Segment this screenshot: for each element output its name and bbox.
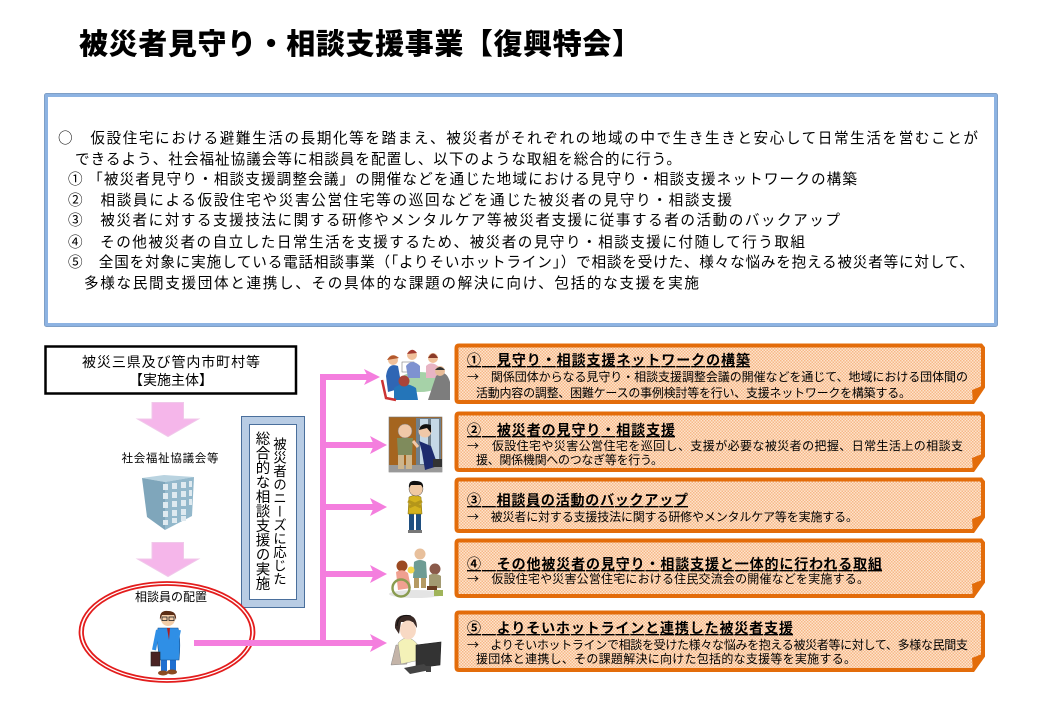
panel: overview (44, 94, 998, 326)
card 4: integrated efforts: ④ その他被災者の見守り・相談支援と一体的に行われる取組 (467, 554, 882, 574)
card 5: hotline (456, 612, 983, 671)
council label: 社会福祉協議会等 (122, 450, 218, 466)
overview text: ③ 被災者に対する支援技法に関する研修やメンタルケア等被災者支援に従事する者の活動のバックアップ (68, 209, 840, 230)
overview text: ④ その他被災者の自立した日常生活を支援するため、被災者の見守り・相談支援に付随して行う取組 (68, 231, 805, 252)
connector arrows (194, 369, 387, 652)
overview text: ○ 仮設住宅における避難生活の長期化等を踏まえ、被災者がそれぞれの地域の中で生き生きと安心して日常生活を営むことが (58, 127, 978, 148)
card 2: watching over: 援、関係機関へのつなぎ等を行う。 (476, 451, 663, 468)
card 5: hotline: ⑤ よりそいホットラインと連携した被災者支援 (467, 618, 793, 638)
implementing body box (46, 346, 296, 394)
implementing body box: 【実施主体】 (129, 370, 213, 390)
overview text: 多様な民間支援団体と連携し、その具体的な課題の解決に向け、包括的な支援を実施 (84, 272, 699, 293)
side box: comprehensive support (242, 416, 304, 608)
red double ellipse: counselor placement (80, 582, 254, 682)
side box: comprehensive support: 被災者のニーズに応じた (270, 437, 290, 586)
icon: hotline operator at computer (391, 615, 441, 674)
card 2: watching over: → 仮設住宅や災害公営住宅を巡回し、支援が必要な被災者の把握、日常生活上の相談支 (467, 437, 963, 454)
icon: building (142, 475, 194, 530)
icon: counselor with briefcase (151, 611, 180, 676)
card 5: hotline: → よりそいホットラインで相談を受けた様々な悩みを抱える被災者等に対して、多様な民間支 (467, 636, 968, 653)
card 2: watching over: ② 被災者の見守り・相談支援 (467, 420, 675, 440)
icon: residents exchange group (389, 548, 443, 598)
card 3: backup: ③ 相談員の活動のバックアップ (467, 490, 688, 510)
red double ellipse: counselor placement: 相談員の配置 (135, 588, 207, 605)
overview text (58, 127, 978, 293)
icon: home visit (389, 417, 442, 472)
overview text: ② 相談員による仮設住宅や災害公営住宅等の巡回などを通じた被災者の見守り・相談支援 (68, 189, 732, 210)
card 1: network: 活動内容の調整、困難ケースの事例検討等を行い、支援ネットワークを構築する。 (476, 384, 911, 401)
card 3: backup (456, 480, 983, 532)
overview text: できるよう、社会福祉協議会等に相談員を配置し、以下のような取組を総合的に行う。 (75, 148, 681, 169)
card 1: network: ① 見守り・相談支援ネットワークの構築 (467, 350, 750, 370)
icon: meeting group (382, 350, 450, 400)
overview text: ① 「被災者見守り・相談支援調整会議」の開催などを通じた地域における見守り・相談支援ネットワークの構築 (68, 168, 857, 189)
icon: thinking man (408, 481, 423, 533)
title: 被災者見守り・相談支援事業【復興特会】 (79, 21, 641, 63)
card 3: backup: → 被災者に対する支援技法に関する研修やメンタルケア等を実施する。 (467, 508, 858, 525)
arrow: down 2 (138, 542, 198, 576)
implementing body box: 被災三県及び管内市町村等 (82, 352, 260, 372)
overview text: ⑤ 全国を対象に実施している電話相談事業（「よりそいホットライン」）で相談を受けた、様々な悩みを抱える被災者等に対して、 (68, 251, 974, 272)
card 4: integrated efforts (456, 540, 983, 597)
card 2: watching over (456, 414, 983, 471)
card 5: hotline: 援団体と連携し、その課題解決に向けた包括的な支援等を実施する。 (476, 650, 856, 667)
card 1: network (456, 346, 983, 403)
card 1: network: → 関係団体からなる見守り・相談支援調整会議の開催などを通じて、地域における団体間の (467, 368, 968, 385)
side box: comprehensive support: 総合的な相談支援の実施 (252, 431, 274, 592)
arrow: down 1 (138, 402, 198, 436)
card 4: integrated efforts: → 仮設住宅や災害公営住宅における住民交流会の開催などを実施する。 (467, 570, 869, 587)
